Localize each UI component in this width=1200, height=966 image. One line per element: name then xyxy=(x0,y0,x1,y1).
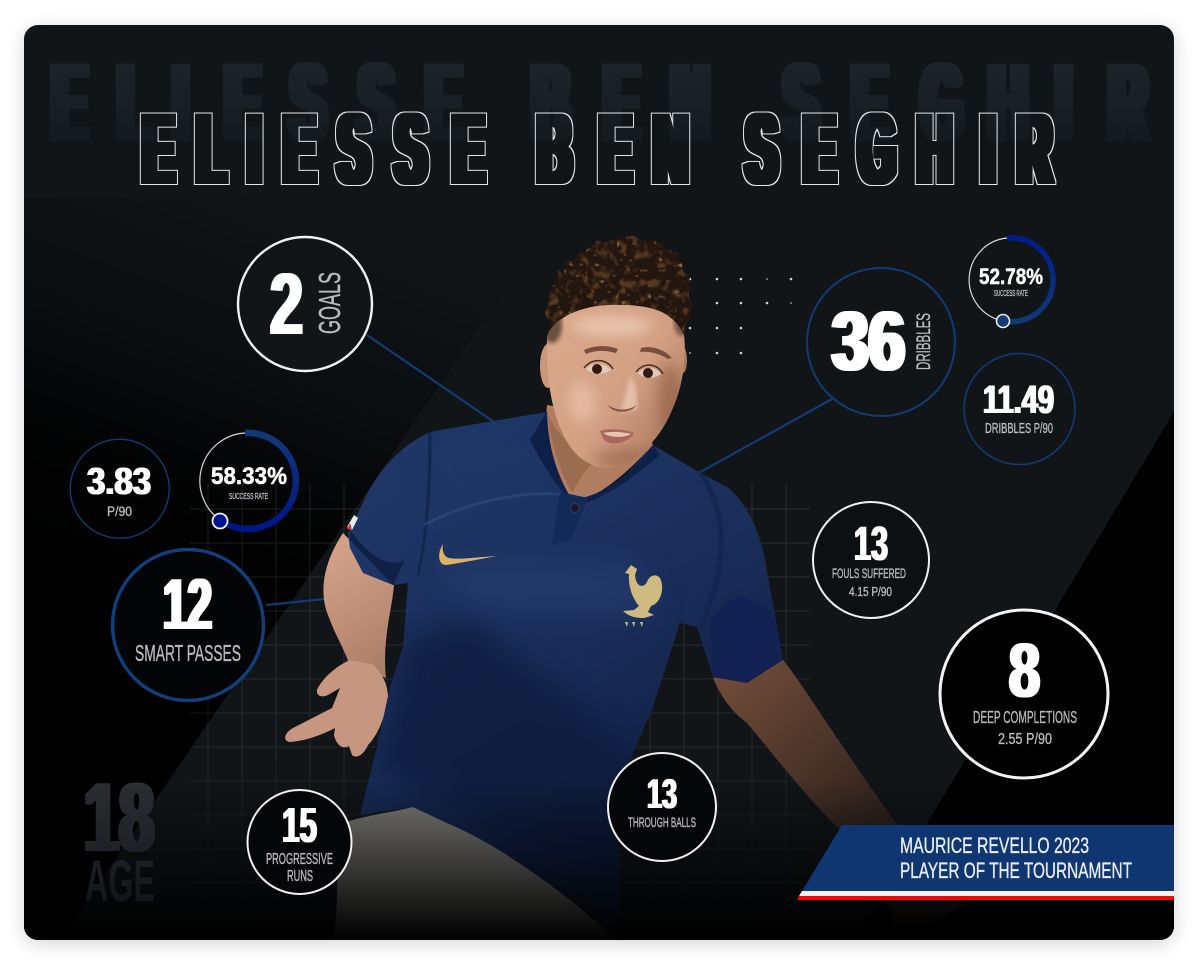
left hand xyxy=(285,660,388,757)
success ring: dribbles: 52.78% xyxy=(979,264,1043,289)
success ring: dribbles: SUCCESS RATE xyxy=(994,289,1028,298)
stat: progressive runs: PROGRESSIVE xyxy=(266,851,333,868)
bottom fade xyxy=(24,780,1174,940)
stat: smart passes xyxy=(112,550,264,700)
nose xyxy=(608,405,636,412)
connector lines xyxy=(266,335,832,605)
stat: fouls suffered: FOULS SUFFERED xyxy=(832,565,906,581)
age stat xyxy=(84,762,155,914)
success ring: passes: SUCCESS RATE xyxy=(229,491,268,501)
rooster crest xyxy=(623,565,662,627)
success ring: dribbles xyxy=(969,238,1053,328)
stat: progressive runs xyxy=(248,790,352,894)
background shapes xyxy=(24,275,1174,940)
placket and button xyxy=(552,492,588,545)
hair xyxy=(548,238,691,338)
title: ELIESSE BEN SEGHIR xyxy=(143,95,1051,205)
stat: dribbles xyxy=(807,268,955,416)
stat: smart passes: 12 xyxy=(163,565,212,645)
mouth xyxy=(600,429,634,443)
banner: MAURICE REVELLO 2023 xyxy=(900,833,1089,858)
stat: through balls xyxy=(608,753,716,861)
stat: progressive runs: 15 xyxy=(282,799,317,853)
stat: goals xyxy=(238,237,372,371)
stat: deep completions xyxy=(940,610,1108,778)
face xyxy=(547,305,685,468)
stat: deep completions: 2.55 P/90 xyxy=(998,731,1052,748)
sleeve flag patch xyxy=(347,515,358,530)
collar xyxy=(530,411,660,510)
stat: dribbles: 36 xyxy=(832,294,905,388)
stat: deep completions: 8 xyxy=(1009,628,1040,714)
stat: goals: GOALS xyxy=(312,272,347,334)
shorts xyxy=(335,807,602,928)
right forearm xyxy=(713,660,965,925)
success ring: passes xyxy=(200,433,296,529)
neck xyxy=(545,405,653,497)
ears xyxy=(540,344,550,388)
stat: deep completions: DEEP COMPLETIONS xyxy=(973,707,1077,727)
stat: progressive runs: RUNS xyxy=(287,868,313,885)
stat: through balls: 13 xyxy=(647,770,677,817)
stat: dribbles p/90: 11.49 xyxy=(983,378,1054,422)
stat: smart passes: SMART PASSES xyxy=(135,640,241,666)
stat: fouls suffered: 13 xyxy=(854,518,888,571)
jersey shading xyxy=(350,432,782,823)
stat: passes p/90 xyxy=(70,439,169,538)
ghost name: ELIESSE BEN SEGHIR xyxy=(52,41,1147,164)
age stat: 18 xyxy=(84,762,154,872)
stat: fouls suffered xyxy=(813,502,929,618)
stat: dribbles p/90: DRIBBLES P/90 xyxy=(985,421,1053,437)
banner xyxy=(797,825,1174,900)
swoosh xyxy=(439,544,498,565)
jersey body xyxy=(348,412,783,938)
eyes and brows xyxy=(584,346,672,378)
stat: goals: 2 xyxy=(270,256,303,353)
left upper arm xyxy=(323,533,394,678)
stat: dribbles: DRIBBLES xyxy=(914,313,935,370)
player figure xyxy=(285,238,965,942)
decorative dot matrix xyxy=(689,278,792,354)
age stat: AGE xyxy=(85,849,155,914)
face highlights xyxy=(542,307,690,466)
stat: passes p/90: 3.83 xyxy=(87,461,151,503)
stat: passes p/90: P/90 xyxy=(107,503,132,519)
stat: fouls suffered: 4.15 P/90 xyxy=(849,584,892,599)
stat: through balls: THROUGH BALLS xyxy=(628,814,696,830)
stat: dribbles p/90 xyxy=(964,354,1075,464)
success ring: passes: 58.33% xyxy=(211,463,287,490)
